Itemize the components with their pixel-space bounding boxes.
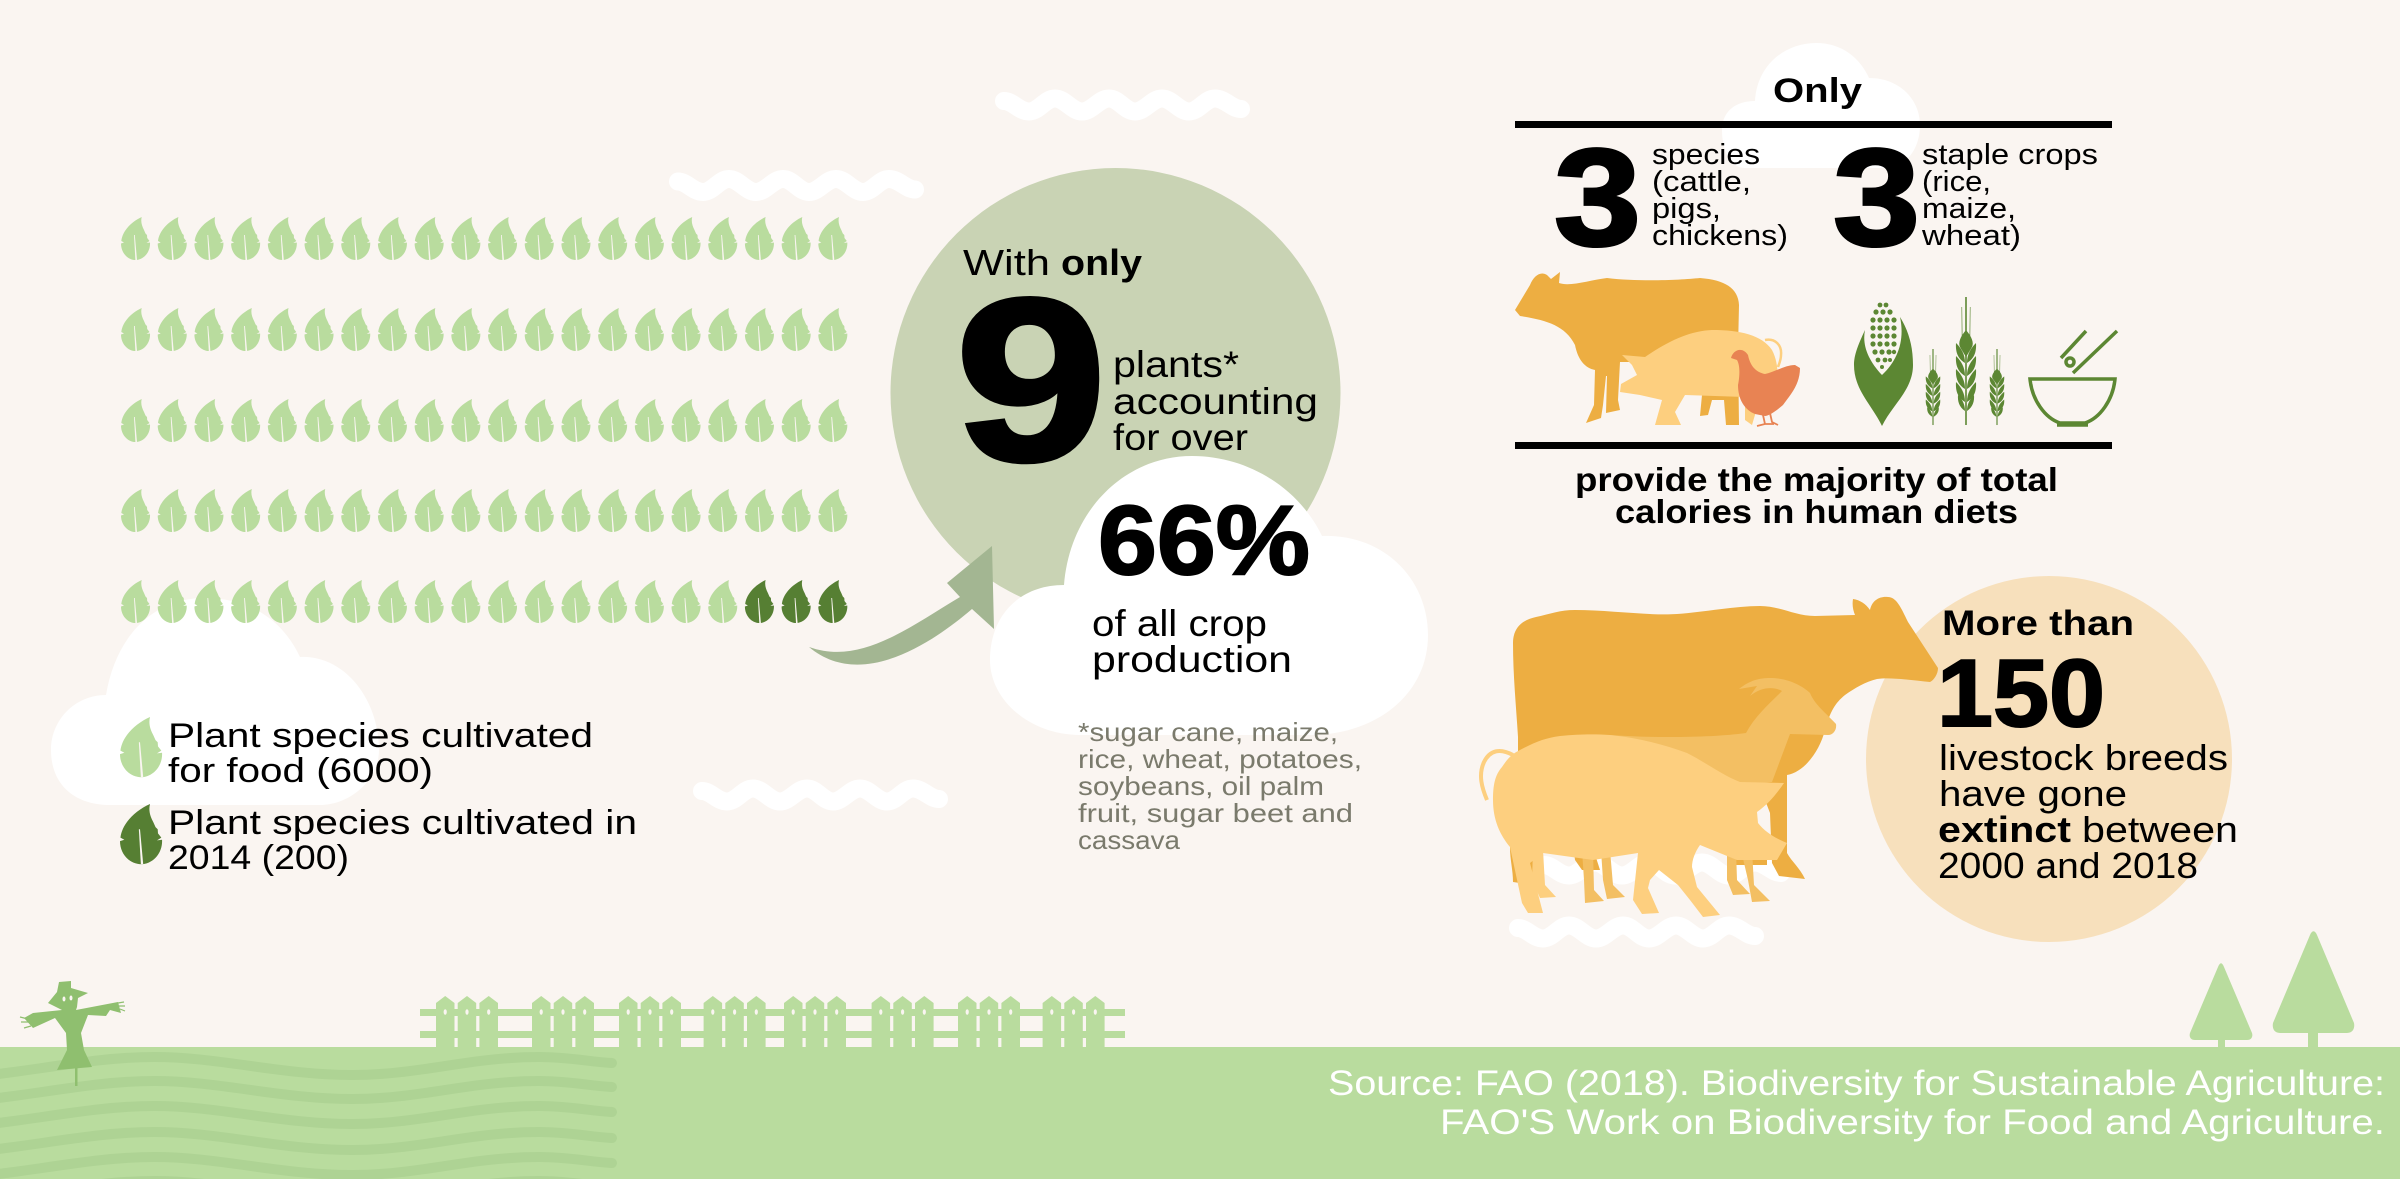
legend text: species cultivated in 2014: Plant species cultivated in [168, 804, 637, 842]
legend text: species cultivated for food [168, 717, 593, 790]
text: majority of total calories [1575, 461, 2058, 530]
icon group: staple crops [1854, 297, 2117, 426]
text: livestock breeds extinct [1938, 737, 2238, 886]
text: with: With [963, 242, 1050, 283]
text: more than: More than [1942, 604, 2134, 643]
text: of all crop production [1092, 603, 1292, 680]
text: plants accounting for over [1113, 344, 1318, 458]
text: livestock breeds extinct: extinct [1938, 809, 2071, 850]
text: staple crops list: (rice, [1922, 166, 1991, 198]
text: species list: pigs, [1652, 193, 1721, 225]
number: 150: 150 [1937, 640, 2105, 747]
white wavy cloud line: behind animals [1544, 862, 1781, 876]
legend text: species cultivated in 2014 [168, 804, 637, 877]
footnote: rice, wheat, potatoes, [1078, 744, 1362, 774]
arrow [809, 546, 994, 665]
pig large [1481, 734, 1787, 917]
text: plants accounting for over: accounting [1113, 381, 1318, 422]
legend text: species cultivated for food: for food (6000) [168, 752, 433, 790]
white wavy cloud line: middle [702, 788, 939, 802]
trees [2190, 931, 2354, 1047]
legend text: species cultivated in 2014: 2014 (200) [168, 839, 349, 877]
circle: extinct breeds [1866, 576, 2232, 942]
cloud: 66 percent [990, 456, 1428, 735]
text: livestock breeds extinct: 2000 and 2018 [1938, 845, 2198, 886]
footnote: cassava [1078, 825, 1181, 855]
text: of all crop production: production [1092, 639, 1292, 680]
text: of all crop production: of all crop [1092, 603, 1267, 644]
ground [0, 1047, 2400, 1179]
text: species list: chickens) [1652, 220, 1788, 252]
icon: corn [1854, 303, 1913, 426]
text: staple crops list [1921, 139, 2098, 252]
icon: bowl [2030, 331, 2117, 425]
text: livestock breeds extinct: have gone [1939, 773, 2127, 814]
icon: cow small [1515, 272, 1739, 425]
pictogram: plant species leaves [121, 217, 847, 623]
text: species list [1652, 139, 1788, 252]
icon: wheat [1926, 297, 2004, 425]
text: majority of total calories: provide the majority of total [1575, 461, 2058, 498]
white wavy cloud line: upper left [678, 179, 915, 192]
icon: hen [1731, 350, 1800, 426]
text: plants accounting for over: plants* [1113, 344, 1239, 385]
footnote [1078, 717, 1362, 855]
text: only bold: only [1061, 242, 1142, 283]
white wavy cloud line: under animals [1518, 926, 1755, 938]
rule top [1515, 121, 2112, 128]
text: staple crops list: wheat) [1921, 220, 2021, 252]
fence [420, 996, 1125, 1047]
source: FAO'S Work on Biodiversity for Food and Agriculture. [1440, 1103, 2385, 1142]
number: 3 staple crops: 3 [1833, 121, 1920, 275]
cloud behind legend [51, 598, 379, 805]
legend [120, 717, 637, 877]
icon: dark leaf [120, 804, 162, 864]
number: 3 species: 3 [1554, 121, 1641, 275]
source [1328, 1064, 2385, 1142]
cow large [1510, 597, 1938, 885]
text: livestock breeds extinct: between [2082, 809, 2238, 850]
number: 9: 9 [955, 251, 1107, 510]
icon group: cattle pig chicken [1515, 272, 1800, 426]
legend text: species cultivated for food: Plant species cultivated [168, 717, 593, 755]
text: plants accounting for over: for over [1113, 417, 1248, 458]
text: species list: (cattle, [1652, 166, 1751, 198]
icon: light leaf [120, 717, 162, 777]
field furrows [0, 1057, 612, 1179]
scarecrow [20, 981, 125, 1086]
text: staple crops list: staple crops [1922, 139, 2098, 171]
white wavy cloud line: top [1004, 98, 1241, 112]
footnote: *sugar cane, maize, [1078, 717, 1338, 747]
icon: pig small [1620, 330, 1781, 425]
number: 66 percent: 66% [1098, 485, 1310, 595]
heading: only: Only [1773, 72, 1862, 110]
footnote: fruit, sugar beet and [1078, 798, 1353, 828]
cloud behind only [1722, 43, 1920, 168]
source: Source: FAO (2018). Biodiversity for Sustainable Agriculture: [1328, 1064, 2385, 1103]
illustration: livestock [1481, 597, 1938, 917]
circle: nine plants [890, 168, 1340, 618]
text: majority of total calories: calories in human diets [1615, 493, 2018, 530]
rule bottom [1515, 442, 2112, 449]
footnote: soybeans, oil palm [1078, 771, 1324, 801]
text: species list: species [1652, 139, 1760, 171]
text: livestock breeds extinct: livestock breeds [1939, 737, 2228, 778]
text: staple crops list: maize, [1922, 193, 2016, 225]
goat [1582, 678, 1836, 903]
